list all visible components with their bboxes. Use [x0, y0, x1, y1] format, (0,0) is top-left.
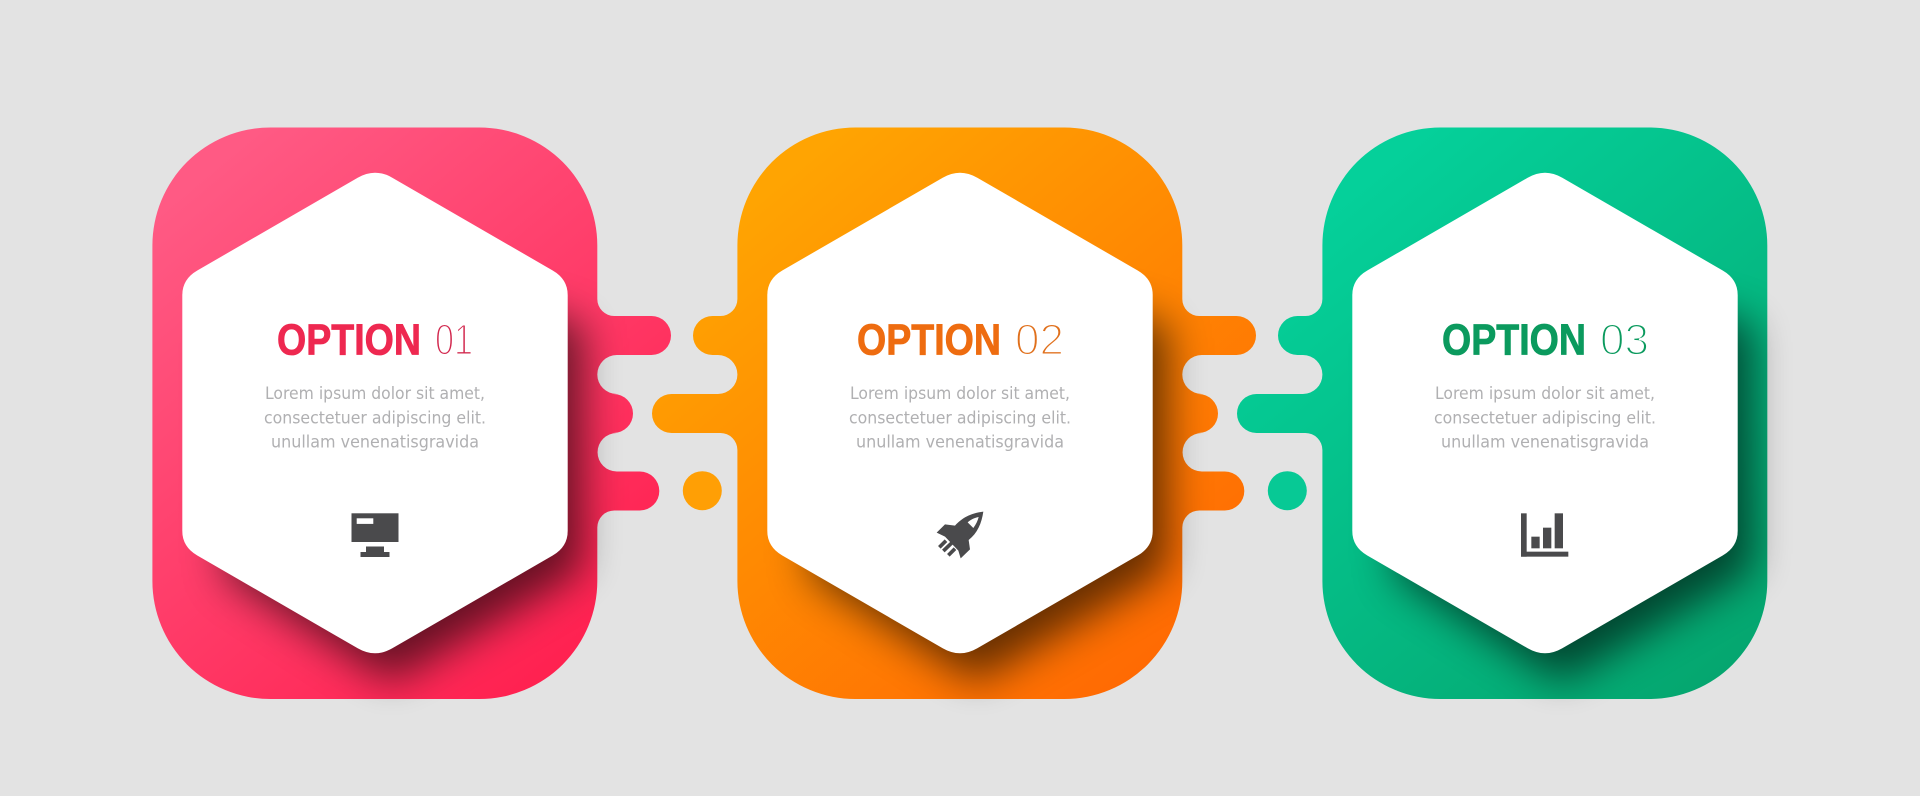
card shape with connector tabs 01	[152, 128, 671, 699]
body text 02: unullam venenatisgravida	[856, 432, 1064, 452]
soft shadow on background 02	[810, 270, 1168, 682]
icon: monitor	[352, 513, 398, 557]
body text 02	[849, 384, 1071, 452]
hexagon shadow on card 03	[1395, 270, 1753, 682]
heading: option 01: OPTION	[277, 316, 421, 364]
heading: option 02: OPTION	[857, 316, 1001, 364]
connector dot orange	[683, 471, 722, 510]
soft shadow on background 03	[1395, 270, 1753, 682]
icon: bar chart	[1521, 513, 1568, 557]
panel: option 01	[152, 128, 671, 699]
soft shadow on background 01	[225, 270, 583, 682]
body text 01: Lorem ipsum dolor sit amet,	[265, 384, 485, 404]
card shape with connector tabs 03	[1237, 128, 1767, 699]
panel: option 03	[1237, 128, 1767, 699]
body text 03: Lorem ipsum dolor sit amet,	[1435, 384, 1655, 404]
card shape with connector tabs 02	[652, 128, 1256, 699]
heading: option 02: 02	[1015, 316, 1064, 364]
white hexagon 01	[182, 173, 568, 653]
body text 02: consectetuer adipiscing elit.	[849, 409, 1071, 429]
heading: option 01: 01	[435, 316, 473, 364]
body text 03: consectetuer adipiscing elit.	[1434, 409, 1656, 429]
icon: rocket	[937, 512, 983, 558]
connector dot green	[1268, 471, 1307, 510]
body text 02: Lorem ipsum dolor sit amet,	[850, 384, 1070, 404]
white hexagon 03	[1352, 173, 1738, 653]
body text 01: consectetuer adipiscing elit.	[264, 409, 486, 429]
body text 03: unullam venenatisgravida	[1441, 432, 1649, 452]
body text 03	[1434, 384, 1656, 452]
hexagon shadow on card 02	[810, 270, 1168, 682]
body text 01	[264, 384, 486, 452]
body text 01: unullam venenatisgravida	[271, 432, 479, 452]
white hexagon 02	[767, 173, 1153, 653]
hexagon shadow on card 01	[225, 270, 583, 682]
heading: option 03: 03	[1600, 316, 1649, 364]
panel: option 02	[652, 128, 1256, 699]
heading: option 03: OPTION	[1442, 316, 1586, 364]
